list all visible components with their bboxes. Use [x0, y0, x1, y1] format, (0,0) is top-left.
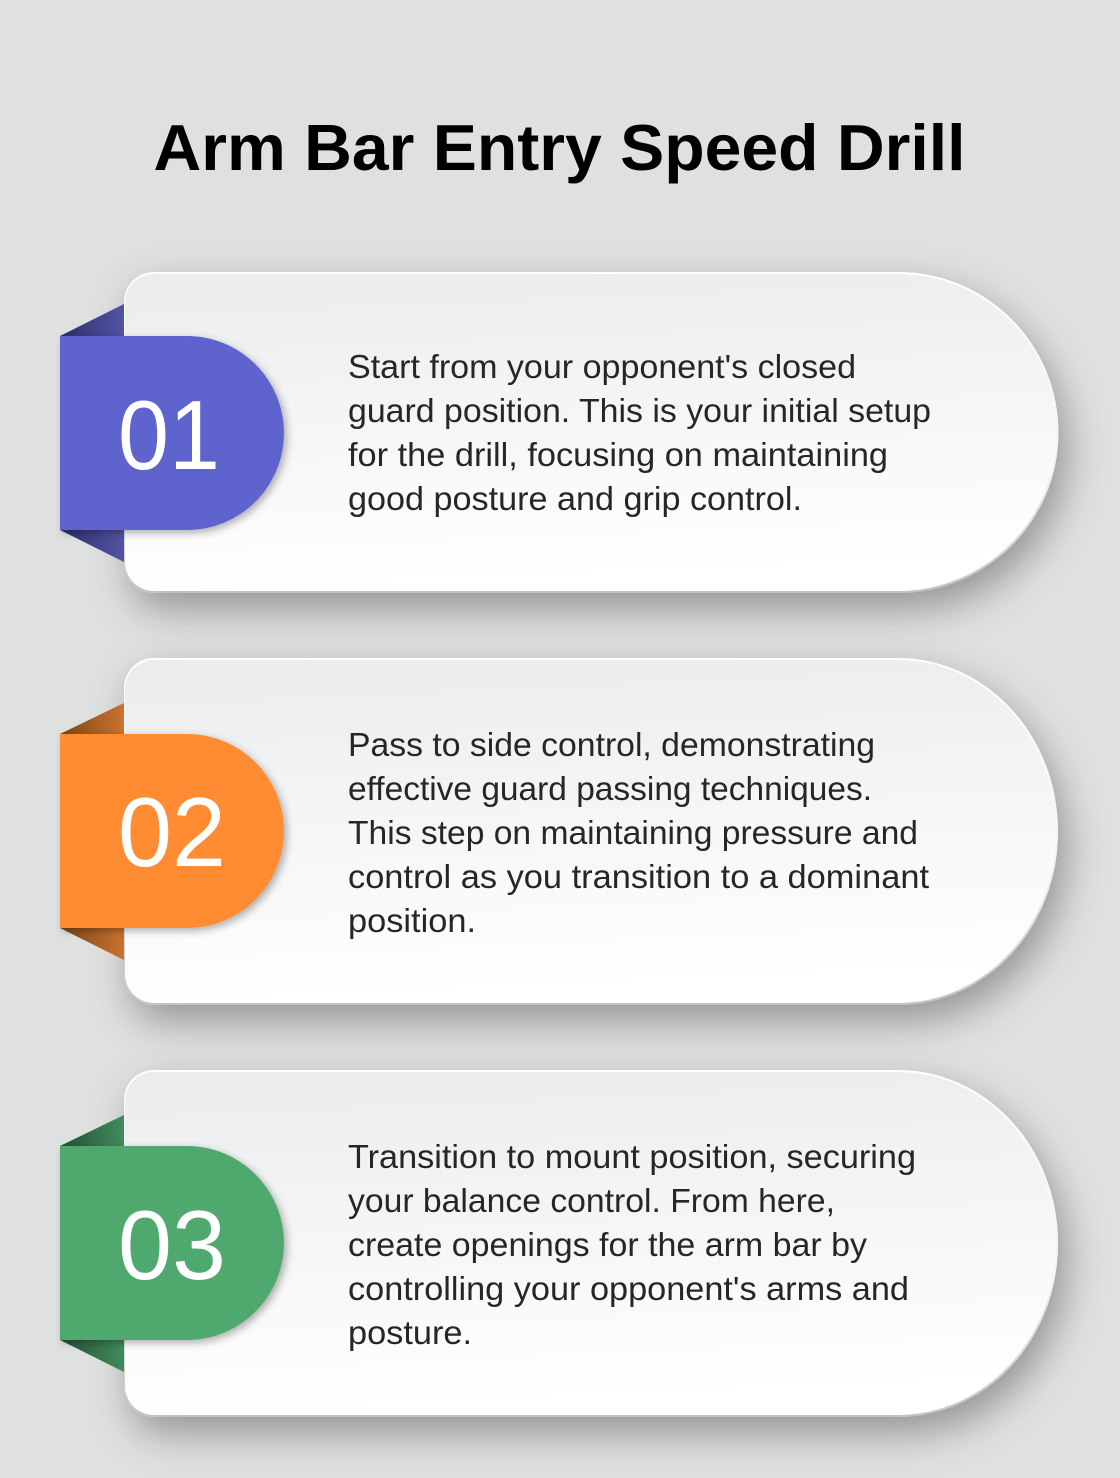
- text: step 03 description: your balance control. From here,: [348, 1182, 835, 1219]
- text: step 02 description: control as you transition to a dominant: [348, 858, 929, 895]
- text: step 01 description: guard position. This is your initial setup: [348, 392, 931, 429]
- panel: step 03: [60, 1070, 1058, 1417]
- text: step 01 description: [348, 348, 931, 517]
- panel: step 02: [60, 658, 1058, 1005]
- ribbon folds: step 01: [60, 304, 124, 562]
- ribbon folds: step 02: [60, 703, 124, 960]
- text: step 03 description: Transition to mount position, securing: [348, 1138, 916, 1175]
- text: step 03 description: posture.: [348, 1314, 472, 1351]
- text: step 02 description: This step on maintaining pressure and: [348, 814, 918, 851]
- text: step 01 description: Start from your opponent's closed: [348, 348, 856, 385]
- text: step 03 description: [348, 1138, 916, 1351]
- number tab: step 03: [60, 1146, 284, 1340]
- card: step 01: [124, 272, 1058, 593]
- ribbon folds: step 03: [60, 1115, 124, 1372]
- panel: step 01: [60, 272, 1058, 593]
- number: 01: 01: [118, 380, 220, 490]
- number tab: step 01: [60, 336, 284, 530]
- number tab: step 02: [60, 734, 284, 928]
- number: 03: 03: [118, 1190, 226, 1300]
- title: Arm Bar Entry Speed Drill: [154, 111, 966, 184]
- text: step 01 description: for the drill, focusing on maintaining: [348, 436, 888, 473]
- text: step 02 description: position.: [348, 902, 476, 939]
- number: 02: 02: [118, 777, 226, 887]
- text: step 03 description: controlling your opponent's arms and: [348, 1270, 909, 1307]
- card: step 02: [124, 658, 1058, 1005]
- card: step 03: [124, 1070, 1058, 1417]
- text: step 02 description: [348, 726, 929, 939]
- text: step 01 description: good posture and grip control.: [348, 480, 802, 517]
- text: step 02 description: effective guard passing techniques.: [348, 770, 872, 807]
- text: step 02 description: Pass to side control, demonstrating: [348, 726, 875, 763]
- text: step 03 description: create openings for the arm bar by: [348, 1226, 868, 1263]
